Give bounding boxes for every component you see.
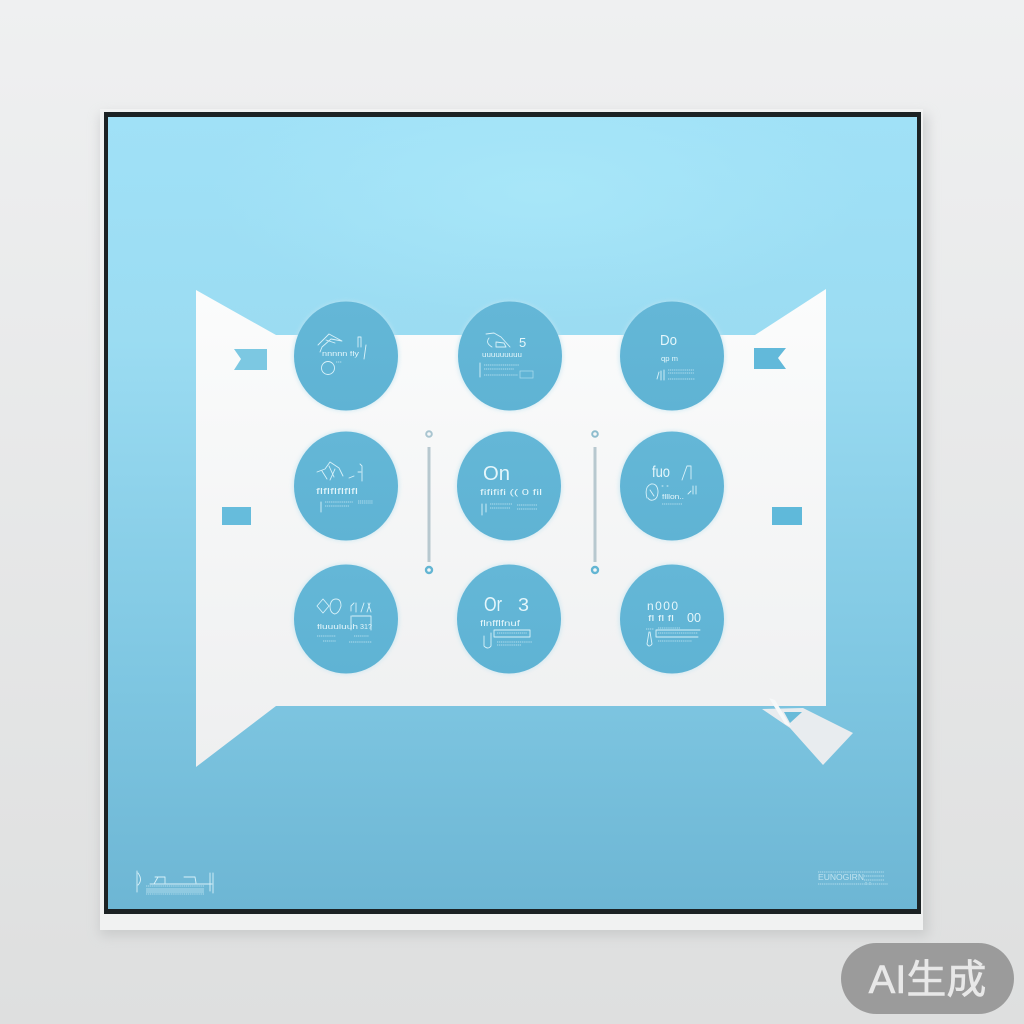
circle 5 (456, 431, 562, 541)
ring icon (322, 362, 334, 374)
circle 8 heading: Or (484, 594, 502, 616)
blue field glow (496, 177, 584, 212)
circle 7: 31? (360, 624, 372, 631)
loop icon (646, 484, 658, 500)
circle 6 label: flllon.. (662, 494, 684, 501)
white ribbon panel (196, 289, 826, 767)
circle 1 (293, 301, 399, 411)
circle 1 label: nnnnn fly (322, 351, 360, 358)
circle 4 label: flflflflflfl (316, 487, 358, 496)
circle 3 (619, 301, 725, 411)
circle 7 heading (317, 599, 341, 614)
circle 3 heading: Do (660, 332, 677, 349)
frame shadow (100, 114, 928, 936)
tab right (772, 507, 802, 525)
circle 5 heading: On (483, 463, 510, 485)
blue poster field (108, 117, 917, 909)
tab left (222, 507, 251, 525)
sketch icon (317, 462, 343, 480)
circle 8: 3 (518, 595, 529, 615)
circle 8 label: flnfflfnuf (480, 619, 521, 628)
AI badge (841, 943, 1014, 1014)
circle 2 label: uuuuuuuuu (482, 352, 522, 359)
circle 2 number: 5 (519, 335, 526, 350)
black inner frame (104, 112, 921, 914)
sketch icon (318, 334, 342, 352)
circle 8 (456, 564, 562, 674)
circle 6 (619, 431, 725, 541)
circle 9 number: 00 (687, 610, 701, 625)
connector right (592, 431, 598, 573)
folded paper corner (762, 698, 853, 765)
circle 9 (619, 564, 725, 674)
footer mark right: EUNOGIRN (818, 873, 864, 882)
white outer frame (100, 109, 923, 930)
circle 4 (293, 431, 399, 541)
sketch icon (486, 333, 510, 347)
badge text: AI生成 (869, 958, 986, 1002)
circle 2 (457, 301, 563, 411)
circle 7 label: fluuuluuh (317, 624, 358, 631)
flag left (234, 349, 267, 370)
flag right (754, 348, 786, 369)
connector left (426, 431, 432, 573)
circle 9 label: fl fl fl (648, 614, 674, 623)
footer mark left (137, 871, 213, 894)
circle 3 label: qp m (661, 354, 678, 363)
footer mark right (818, 872, 888, 885)
circle 5 label: fifififi (( 0 fil (480, 488, 542, 497)
circle 9 heading: n000 (647, 599, 678, 613)
circle 7 (293, 564, 399, 674)
circle 6 heading: fuo (652, 464, 670, 481)
